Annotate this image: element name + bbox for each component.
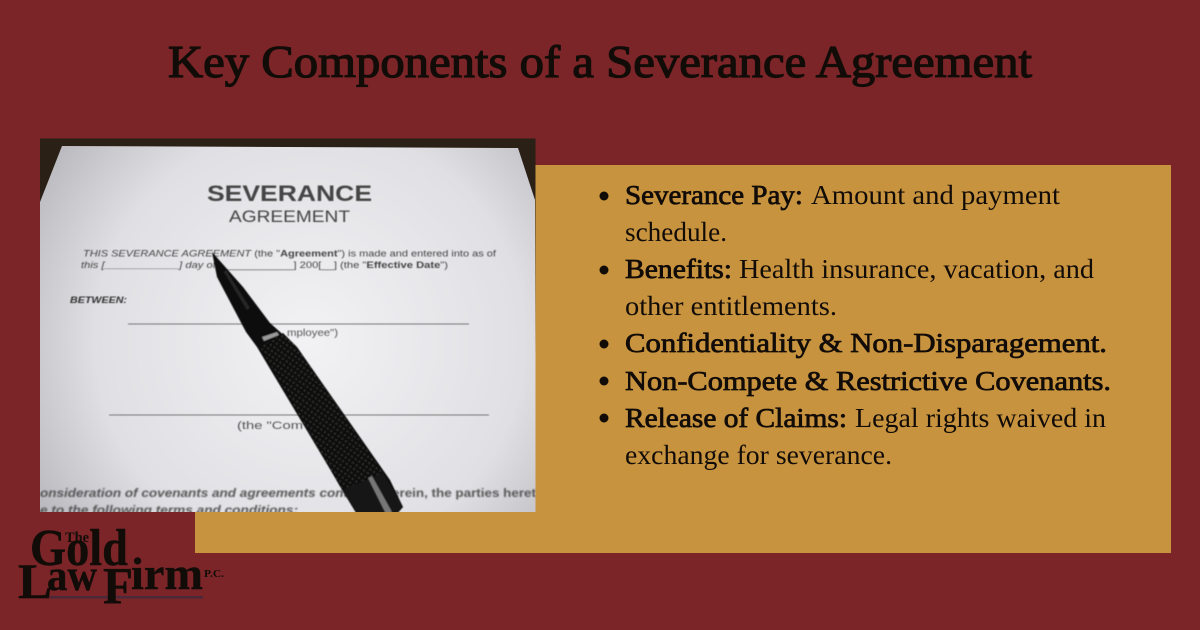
title: Key Components of a Severance Agreement: [168, 36, 1032, 87]
text block: key components list: [600, 179, 1111, 470]
logo: The Gold Law Firm P.C.: F: [103, 558, 133, 615]
list item: severance pay: Amount and payment: [811, 179, 1060, 210]
list item: non-compete: Non-Compete & Restrictive Covenants.: [625, 365, 1111, 396]
list item: release of claims: Release of Claims:: [625, 402, 847, 433]
photo: severance agreement document with pen: BETWEEN:: [70, 295, 127, 306]
logo: The Gold Law Firm P.C.: aw: [47, 551, 97, 600]
logo: The Gold Law Firm P.C.: P.C.: [204, 568, 224, 580]
photo: severance agreement document with pen: (the "Com: [237, 420, 303, 432]
logo: The Gold Law Firm P.C.: irm: [131, 548, 203, 599]
list item: benefits: other entitlements.: [625, 290, 837, 321]
logo: The Gold Law Firm P.C.: L: [18, 553, 52, 609]
photo: severance agreement document with pen: this [____________] day of ____________] 200[__] (the " Effective Date "): [81, 260, 448, 270]
list item: benefits: Benefits:: [625, 253, 732, 284]
icon: pen: [212, 252, 403, 516]
logo: The Gold Law Firm P.C.: [18, 520, 224, 615]
photo: severance agreement document with pen: erein, the parties heret: [392, 486, 536, 500]
logo: The Gold Law Firm P.C.: The: [65, 530, 89, 546]
list item: confidentiality: Confidentiality & Non-Disparagement.: [625, 327, 1107, 358]
logo: The Gold Law Firm P.C.: Gold: [30, 520, 128, 577]
list item: release of claims: exchange for severance.: [625, 439, 892, 470]
photo: severance agreement document with pen: e to the following terms and conditions:: [40, 503, 298, 517]
photo: severance agreement document with pen: THIS SEVERANCE AGREEMENT (the " Agreement ") is made and entered into as of: [83, 248, 497, 258]
photo: severance agreement document with pen: onsideration of covenants and agreements cont: [40, 486, 349, 500]
photo: severance agreement document with pen: AGREEMENT: [229, 207, 350, 226]
panel: gold content panel: [195, 165, 1171, 553]
list item: severance pay: [600, 179, 1060, 247]
photo: severance agreement document with pen: [40, 138, 536, 517]
list item: severance pay: schedule.: [625, 216, 727, 247]
list item: release of claims: Legal rights waived in: [855, 402, 1106, 433]
list item: release of claims: [600, 402, 1106, 470]
photo: severance agreement document with pen: SEVERANCE: [207, 181, 372, 206]
photo: severance agreement document with pen: mployee"): [287, 327, 338, 339]
list item: benefits: Health insurance, vacation, and: [739, 253, 1094, 284]
list item: benefits: [600, 253, 1094, 321]
list item: severance pay: Severance Pay:: [625, 179, 803, 210]
